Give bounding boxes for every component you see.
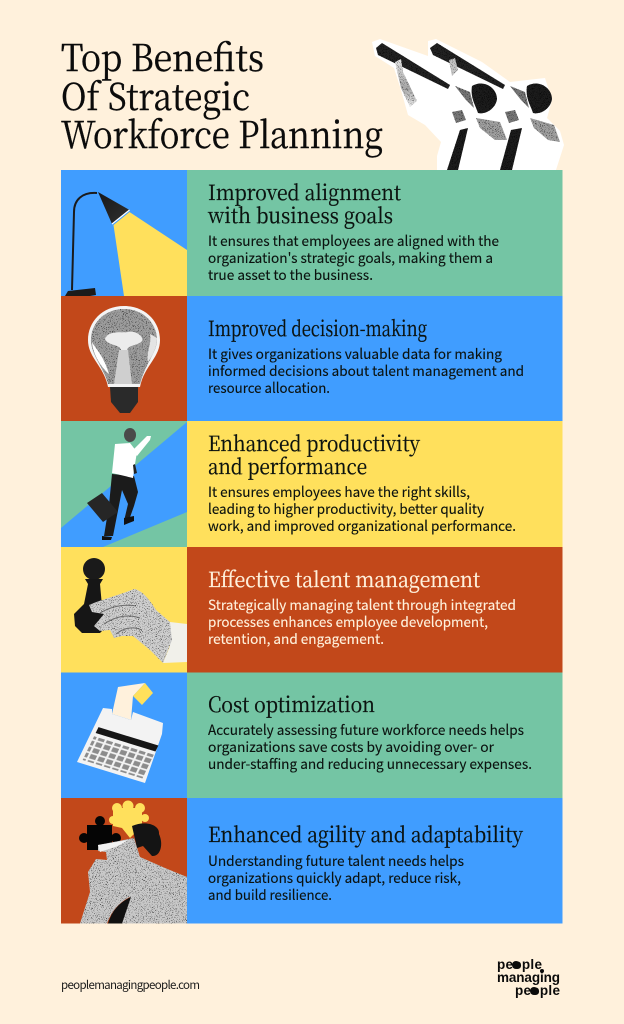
footer url: peoplemanagingpeople.com [61, 977, 200, 993]
title: Of Strategic [61, 67, 250, 121]
heading: Enhanced agility and adaptability [208, 819, 523, 849]
panel: improved decision-making [61, 296, 562, 421]
text block: resource allocation. [208, 378, 330, 398]
text block: informed decisions about talent management and [208, 361, 524, 381]
text block: under-staffing and reducing unnecessary expenses. [208, 754, 532, 774]
text block: work, and improved organizational performance. [208, 516, 516, 536]
logo: people managing people: managing [497, 970, 560, 985]
panel icon: light bulb [61, 296, 187, 421]
title: Workforce Planning [61, 105, 383, 159]
panel: enhanced productivity [61, 421, 562, 547]
heading: Improved decision-making [208, 313, 427, 343]
text block [208, 344, 524, 398]
logo: people managing people [497, 957, 560, 998]
text block: true asset to the business. [208, 265, 373, 285]
logo: people managing people: people [497, 957, 542, 972]
text block [208, 482, 516, 536]
heading: Cost optimization [208, 689, 375, 719]
panel icon: thinking statue with puzzle pieces [61, 798, 187, 924]
heading [208, 428, 420, 481]
panel icon: adding machine calculator [61, 672, 187, 798]
text block: Strategically managing talent through integrated [208, 595, 516, 615]
text block: organizations save costs by avoiding over- or [208, 737, 495, 757]
title [61, 28, 383, 159]
panel icon: desk lamp [61, 170, 187, 296]
panel: effective talent management [61, 547, 562, 672]
title: Top Benefits [61, 28, 264, 82]
panel: enhanced agility [61, 798, 562, 924]
heading: Enhanced productivity [208, 428, 420, 458]
text block: and build resilience. [208, 885, 332, 905]
text block [208, 851, 464, 905]
panel icon: man climbing with briefcase [61, 421, 187, 547]
text block [208, 231, 499, 285]
text block [208, 595, 516, 649]
heading: with business goals [207, 200, 393, 230]
heading: and performance [208, 451, 367, 481]
heading [207, 177, 401, 230]
text block: It ensures employees have the right skills, [208, 482, 470, 502]
text block: retention, and engagement. [208, 629, 384, 649]
text block: It gives organizations valuable data for making [208, 344, 502, 364]
logo: people managing people: people [515, 983, 560, 998]
text block: Understanding future talent needs helps [208, 851, 464, 871]
icon: two businessmen looking through telescopes [372, 39, 564, 170]
text block [208, 720, 532, 774]
text block: leading to higher productivity, better quality [208, 499, 485, 519]
text block: It ensures that employees are aligned with the [208, 231, 499, 251]
text block: processes enhances employee development, [208, 612, 488, 632]
panel icon: hand holding chess pawn [61, 547, 187, 672]
heading: Effective talent management [208, 564, 480, 594]
panel: cost optimization [61, 672, 562, 798]
heading: Improved alignment [208, 177, 401, 207]
text block: Accurately assessing future workforce needs helps [208, 720, 524, 740]
text block: organization's strategic goals, making them a [208, 248, 493, 268]
panel: improved alignment [61, 170, 562, 296]
text block: organizations quickly adapt, reduce risk, [208, 868, 461, 888]
